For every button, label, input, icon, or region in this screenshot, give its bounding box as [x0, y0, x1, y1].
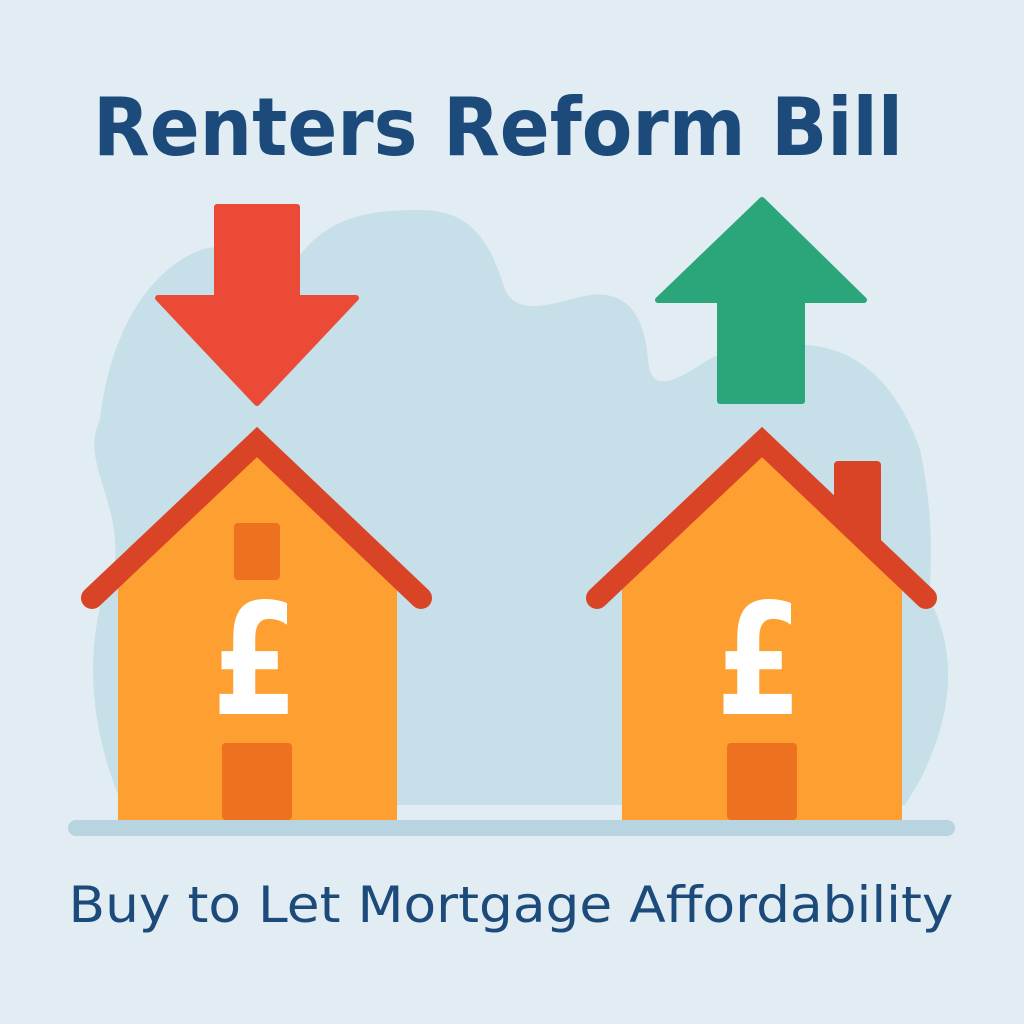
- house: left: £: [212, 570, 298, 751]
- arrow: green up: [658, 200, 864, 401]
- ground line: [68, 820, 955, 836]
- house: right: [597, 442, 926, 820]
- background blob: [93, 210, 948, 805]
- arrow: red down: [158, 207, 356, 403]
- house: left: [92, 442, 421, 820]
- subtitle: Buy to Let Mortgage Affordability: [68, 876, 954, 934]
- title: Renters Reform Bill: [93, 81, 903, 174]
- house: right: £: [716, 570, 802, 751]
